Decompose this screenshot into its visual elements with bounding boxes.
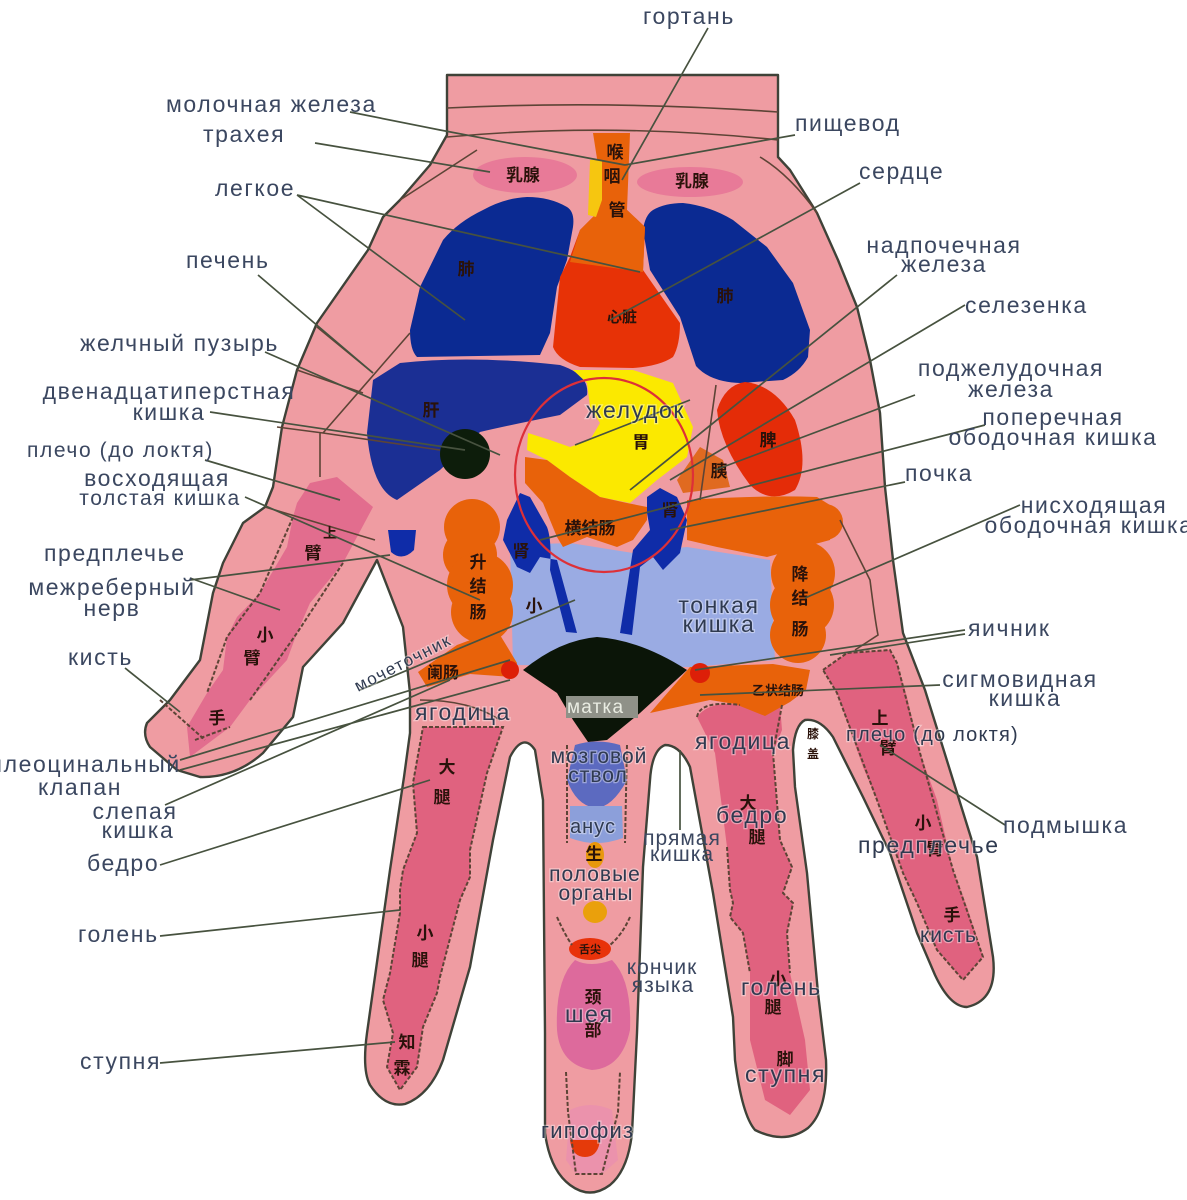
small blue point	[388, 530, 416, 557]
Chinese organ labels: 脚	[776, 1050, 794, 1069]
russian callout labels: надпочечная	[866, 232, 1022, 258]
russian callout labels: кишка	[650, 843, 714, 866]
Chinese organ labels: 结	[792, 588, 808, 608]
russian callout labels: желчный пузырь	[80, 330, 279, 356]
russian callout labels: кисть	[68, 644, 133, 670]
russian callout labels: легкое	[215, 175, 295, 201]
Chinese organ labels: 结	[470, 576, 486, 596]
russian callout labels: железа	[968, 376, 1054, 402]
Chinese organ labels: 咽	[604, 167, 620, 186]
russian callout labels: ободочная кишка	[948, 424, 1158, 450]
heart upper vessel	[570, 133, 645, 272]
small intestine	[510, 543, 775, 667]
tongue tip	[569, 938, 611, 960]
Chinese organ labels: 肠	[470, 603, 486, 622]
russian callout labels: ступня	[80, 1048, 161, 1074]
Chinese organ labels	[208, 143, 960, 1078]
russian callout labels: предплечье	[44, 540, 186, 566]
russian callout labels: гипофиз	[541, 1118, 634, 1143]
hand outline	[145, 75, 994, 1192]
index finger inner zone	[383, 727, 503, 1090]
Chinese organ labels: 乳腺	[675, 172, 709, 191]
uterus label background	[566, 696, 638, 718]
Chinese organ labels: 舌尖	[579, 942, 601, 956]
middle finger neck zone	[557, 960, 630, 1070]
right lung	[643, 203, 810, 383]
Chinese organ labels: 胰	[710, 462, 728, 481]
russian callout labels: селезенка	[965, 292, 1088, 318]
Chinese organ labels: 脾	[760, 431, 776, 450]
russian callout labels: восходящая	[84, 465, 230, 491]
Chinese organ labels: 小	[914, 814, 932, 833]
Chinese organ labels: 升	[470, 553, 486, 572]
russian callout labels: клапан	[38, 774, 122, 800]
Chinese organ labels: 横结肠	[564, 518, 616, 538]
right kidney	[620, 488, 687, 635]
russian callout labels: печень	[186, 247, 270, 273]
Chinese organ labels: 大	[438, 758, 456, 777]
russian callout labels: ступня	[745, 1061, 826, 1087]
Chinese organ labels: 肠	[792, 620, 808, 639]
genital zone	[583, 842, 607, 923]
Chinese organ labels: 膝	[807, 726, 819, 741]
colon junction points	[501, 661, 710, 683]
Chinese organ labels: 手	[944, 905, 960, 925]
Chinese organ labels: 臂	[244, 648, 260, 668]
russian callout labels: трахея	[203, 121, 285, 147]
russian callout labels: кишка	[102, 817, 174, 843]
russian callout labels: шея	[565, 1001, 614, 1027]
transverse colon right	[687, 496, 843, 557]
Chinese organ labels: 霖	[394, 1059, 410, 1078]
russian callout labels: анус	[570, 816, 616, 838]
russian callout labels: почка	[905, 460, 973, 486]
stomach	[527, 370, 693, 503]
Chinese organ labels: 心脏	[607, 308, 637, 326]
palm contours	[265, 327, 878, 720]
russian callout labels: кишка	[683, 611, 755, 637]
Chinese organ labels: 腿	[412, 951, 428, 970]
Chinese organ labels: 小	[416, 924, 434, 943]
ascending colon	[418, 499, 517, 687]
russian callout labels: подмышка	[1003, 812, 1128, 838]
russian callout labels: нисходящая	[1021, 492, 1167, 518]
left lung	[410, 197, 573, 357]
russian callout labels: кисть	[920, 924, 977, 947]
descending colon	[650, 541, 835, 716]
Chinese organ labels: 腿	[748, 828, 766, 847]
russian callout labels: ягодица	[695, 728, 791, 754]
russian callout labels: яичник	[968, 615, 1050, 641]
liver	[367, 359, 587, 500]
Chinese organ labels: 阑肠	[427, 663, 459, 682]
Chinese organ labels: 肺	[716, 287, 734, 306]
red circle	[515, 378, 693, 572]
russian callout labels: сигмовидная	[942, 666, 1098, 692]
Chinese organ labels: 小	[256, 626, 274, 645]
russian callout labels: органы	[559, 882, 633, 905]
russian callout labels: слепая	[92, 798, 178, 824]
russian callout labels: предплечье	[858, 832, 1000, 858]
russian callout labels: кишка	[989, 685, 1061, 711]
russian callout labels: прямая	[643, 827, 721, 850]
Chinese organ labels: 小	[526, 597, 542, 616]
russian callout labels: толстая кишка	[79, 487, 241, 510]
Chinese organ labels: 腿	[434, 788, 450, 807]
russian callout labels: поперечная	[982, 404, 1124, 430]
russian callout labels: двенадцатиперстная	[43, 378, 295, 404]
Chinese organ labels: 乙状结肠	[752, 683, 804, 698]
Chinese organ labels: 手	[208, 708, 226, 728]
Chinese organ labels: 腿	[764, 998, 782, 1017]
Chinese organ labels: 喉	[606, 143, 624, 162]
russian callout labels: голень	[741, 974, 822, 1000]
breast glands	[473, 157, 743, 197]
anus zone	[570, 806, 623, 843]
gallbladder	[440, 429, 490, 479]
Chinese organ labels: 肝	[422, 401, 440, 420]
Chinese organ labels: 颈	[584, 988, 602, 1007]
russian callout labels: матка	[567, 697, 624, 718]
Chinese organ labels: 知	[398, 1033, 416, 1052]
Chinese organ labels: 小	[770, 970, 786, 989]
middle finger tip	[566, 1105, 618, 1174]
russian callout labels: кончик	[627, 956, 697, 979]
Chinese organ labels: 大	[740, 794, 756, 813]
Chinese organ labels: 生	[586, 845, 602, 864]
heart	[553, 210, 680, 368]
Chinese organ labels: 部	[584, 1020, 602, 1040]
Chinese organ labels: 臂	[926, 839, 944, 859]
russian callout labels: мочеточник	[351, 630, 455, 696]
russian callout labels: нерв	[84, 595, 140, 621]
russian callout labels: плечо (до локтя)	[846, 724, 1019, 746]
spleen	[717, 382, 802, 496]
russian callout labels: ствол	[568, 764, 628, 787]
Chinese organ labels: 胃	[632, 433, 650, 452]
russian callout labels: бедро	[87, 850, 159, 876]
russian callout labels: железа	[901, 251, 987, 277]
Chinese organ labels: 上	[872, 709, 888, 728]
Chinese organ labels: 臂	[304, 543, 322, 563]
russian callout labels: голень	[78, 921, 159, 947]
Chinese organ labels: 臂	[880, 738, 896, 758]
russian callout labels: кишка	[133, 399, 205, 425]
brain stem zone	[567, 742, 627, 808]
little finger inner zone	[823, 650, 983, 980]
transverse colon center and pancreas	[525, 457, 647, 547]
russian callout labels: гортань	[643, 3, 735, 29]
pancreas head	[677, 447, 730, 493]
bladder	[523, 637, 687, 742]
russian callout labels: желудок	[586, 397, 685, 423]
russian callout labels: тонкая	[678, 592, 760, 618]
esophagus yellow strip	[588, 160, 602, 217]
left kidney	[503, 493, 577, 633]
Chinese organ labels: 肾	[512, 542, 530, 561]
Chinese organ labels: 管	[608, 200, 626, 220]
russian callout labels: молочная железа	[166, 91, 377, 117]
Chinese organ labels: 乳腺	[506, 166, 540, 185]
russian callout labels: плечо (до локтя)	[27, 439, 214, 462]
russian callout labels: поджелудочная	[918, 355, 1104, 381]
Chinese organ labels: 肾	[662, 501, 678, 520]
Chinese organ labels: 盖	[807, 746, 819, 761]
thumb inner zone	[187, 477, 373, 757]
russian callout labels: сердце	[859, 158, 944, 184]
leader lines	[125, 28, 1020, 1063]
wrist lines	[400, 105, 817, 213]
russian callout labels: межреберный	[28, 574, 196, 600]
russian callout labels: бедро	[716, 802, 788, 828]
russian callout labels: языка	[632, 974, 694, 997]
hypophysis	[570, 1140, 600, 1157]
Chinese organ labels: 上	[323, 525, 337, 541]
russian callout labels: половые	[549, 863, 641, 886]
finger contours	[160, 517, 983, 1174]
Chinese organ labels: 降	[792, 565, 808, 584]
russian callout labels: ягодица	[415, 699, 511, 725]
russian callout labels: пищевод	[795, 110, 901, 136]
ring finger inner zone	[697, 704, 810, 1115]
Chinese organ labels: 肺	[458, 260, 474, 279]
russian callout labels: мозговой	[551, 745, 647, 768]
